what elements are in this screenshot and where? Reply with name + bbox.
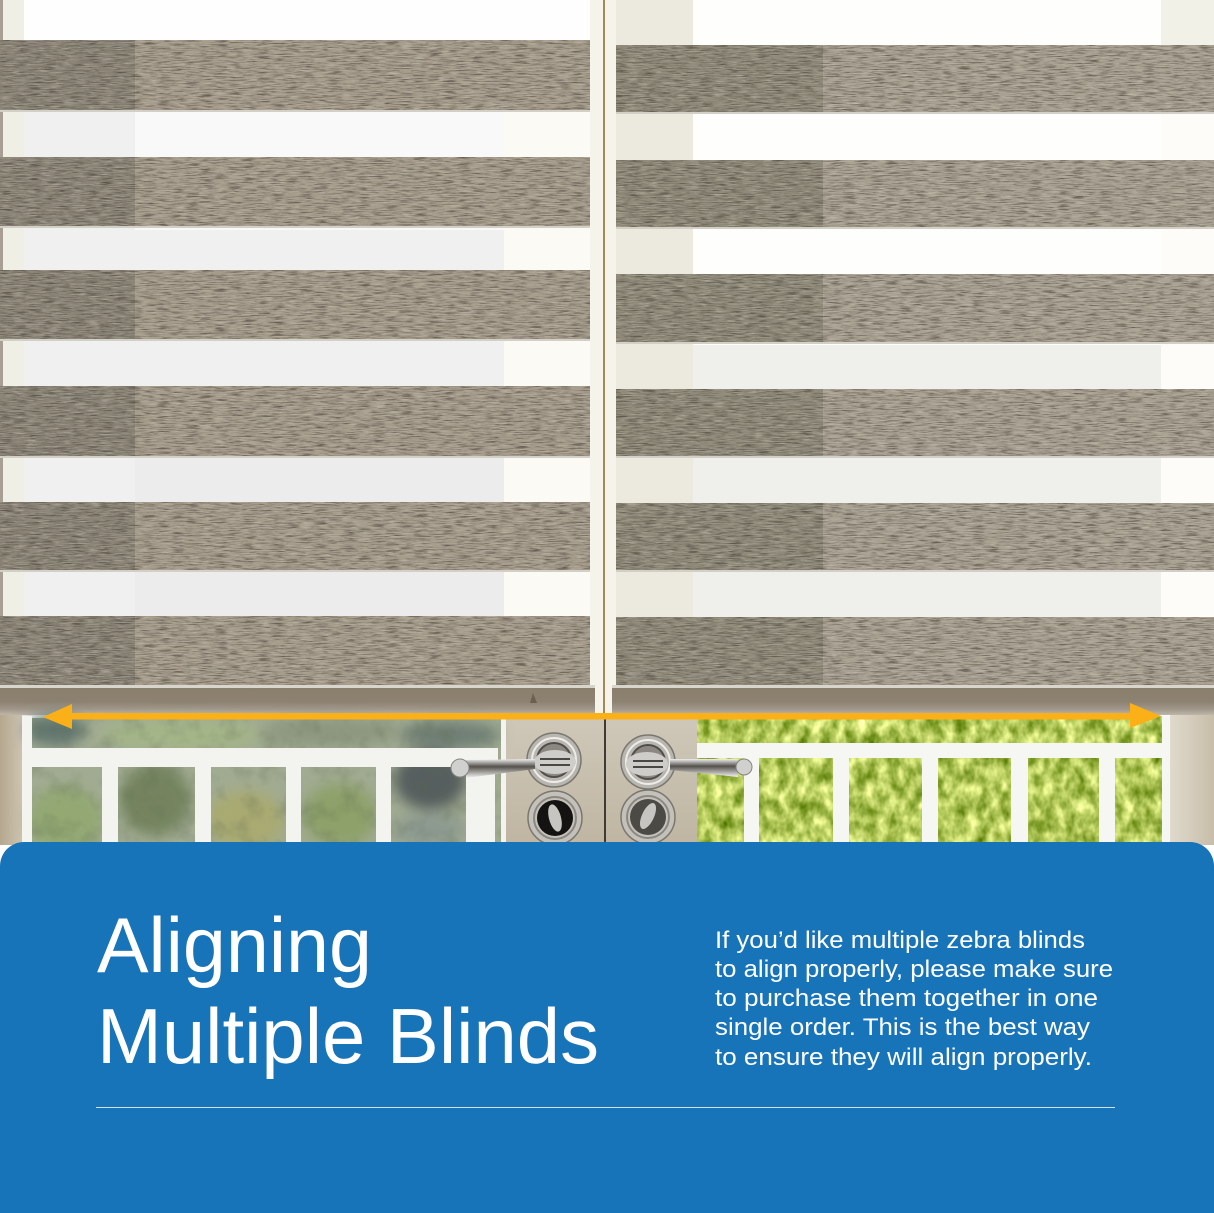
body text: single order. This is the best way: [715, 1014, 1091, 1041]
body text: If you’d like multiple zebra blinds: [715, 927, 1085, 954]
body text: to ensure they will align properly.: [715, 1044, 1092, 1071]
left door panel: [505, 715, 605, 845]
left blind fabric stripes: [0, 0, 590, 716]
left window railing: [22, 716, 506, 846]
left window view: blurred trees: [25, 714, 502, 854]
right door panel: [605, 715, 697, 845]
photo: window with zebra blinds: [0, 0, 1214, 854]
right window view: foliage: [697, 716, 1162, 846]
right window railing: [697, 716, 1170, 846]
left wall edge: [0, 715, 22, 845]
left headrail: [0, 685, 595, 715]
heading: Aligning: [97, 901, 372, 989]
right wall edge: [1170, 715, 1214, 845]
right headrail: [612, 685, 1214, 715]
arrow: double-headed width span: [43, 703, 1161, 729]
sheer background: right blind: [616, 0, 1214, 716]
body text: to align properly, please make sure: [715, 956, 1113, 983]
stripe edge highlights: [0, 110, 1214, 572]
body text: to purchase them together in one: [715, 985, 1098, 1012]
sheer background: left blind: [0, 0, 590, 716]
right door handle and lock: [621, 735, 752, 844]
right blind fabric stripes: [616, 45, 1214, 685]
left door handle and lock: [451, 733, 582, 845]
panel: blue caption: [0, 842, 1214, 1213]
center door frame: [590, 0, 616, 716]
heading: Multiple Blinds: [97, 992, 599, 1080]
